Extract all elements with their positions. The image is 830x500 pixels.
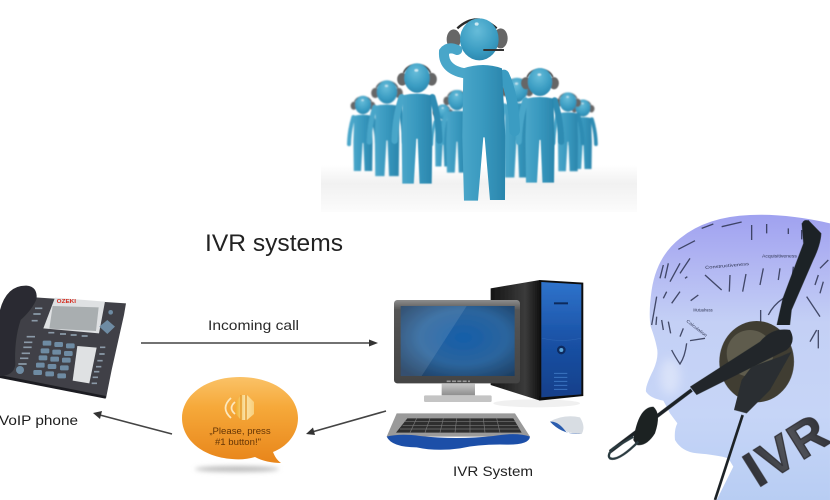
icon: VoIP phone: OZEKI (57, 299, 77, 305)
bubble text: „Please, press (209, 426, 271, 437)
phrenology tiny labels: Acquisitiveness (762, 253, 797, 258)
phrenology tiny labels (685, 253, 797, 338)
icon: IVR system computer (387, 280, 583, 450)
headset (609, 220, 821, 500)
label: incoming call: Incoming call (208, 317, 299, 333)
arrow: bubble to phone (93, 411, 172, 434)
back row agents (349, 78, 596, 177)
voice prompt speech bubble: #1 button!" (215, 437, 261, 448)
label: IVR System: IVR System (453, 463, 533, 479)
title: IVR systems (205, 230, 343, 257)
phrenology tiny labels: Mutualness (693, 308, 713, 313)
arrow: incoming call (141, 340, 378, 346)
panel: call centre agents (321, 18, 637, 212)
head silhouette (646, 215, 830, 500)
voice prompt speech bubble (182, 377, 298, 472)
phrenology tiny labels: Constructiveness (705, 261, 749, 270)
phrenology head with headset (609, 215, 830, 500)
phrenology markings (652, 222, 828, 364)
front agent with raised arm (444, 18, 515, 201)
icon: speaker (226, 395, 254, 420)
phrenology tiny labels: Calculation (685, 319, 709, 338)
icon: VoIP phone (0, 286, 126, 399)
middle row agents (395, 63, 561, 184)
arrow: IVR system to bubble (306, 411, 386, 435)
face highlight (660, 358, 680, 395)
label: VoIP phone: VoIP phone (0, 412, 78, 428)
